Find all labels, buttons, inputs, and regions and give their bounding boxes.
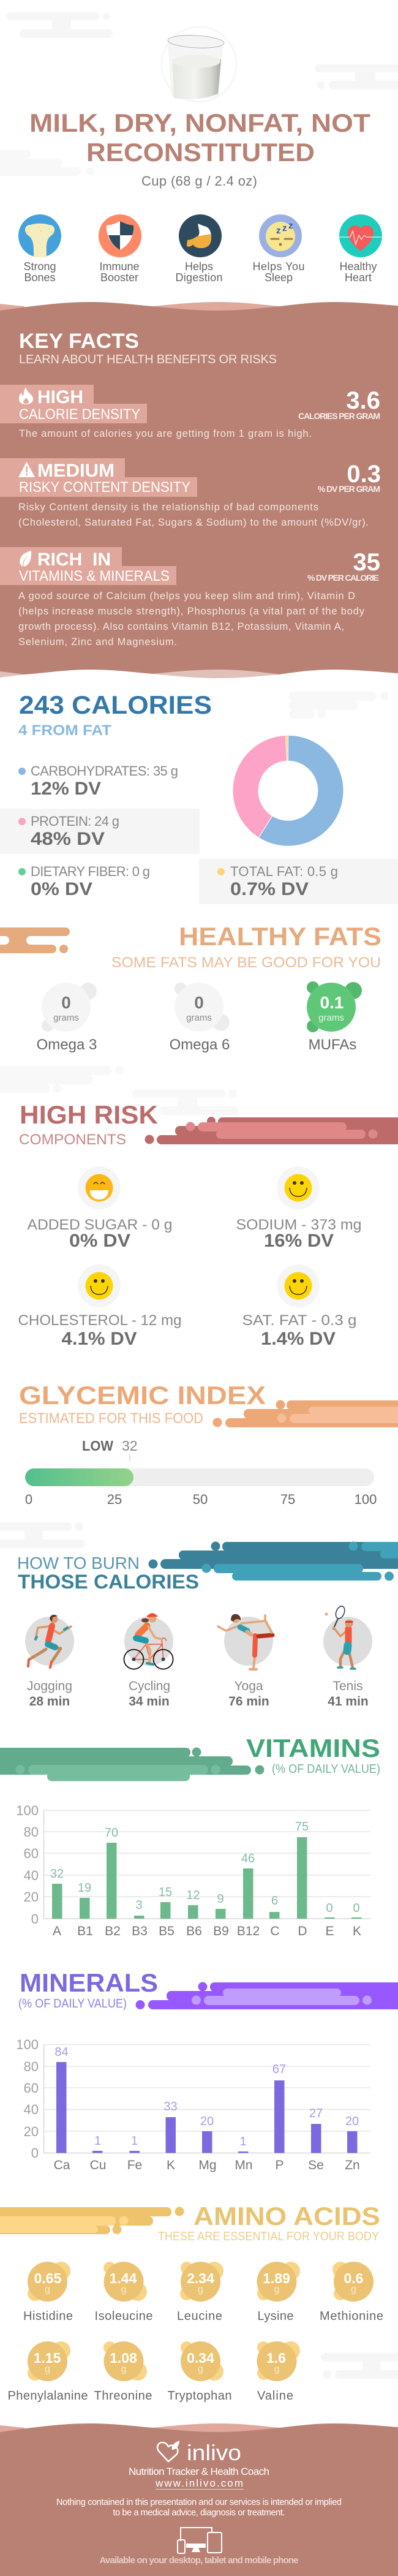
benefit labels: Strong — [23, 260, 56, 273]
legend: total fat: 0.7% DV — [230, 879, 309, 899]
amino: histidine — [23, 2262, 73, 2323]
bar chart: vitamins: 12 — [186, 1889, 200, 1902]
legend: total fat: TOTAL FAT: 0.5 g — [230, 864, 338, 879]
bar chart: minerals: Mn — [235, 2158, 253, 2172]
fat: omega 3: Omega 3 — [37, 1037, 97, 1053]
food photo: glass of milk — [162, 27, 236, 102]
bar chart: vitamins: B6 — [186, 1924, 202, 1938]
panel: key facts — [0, 302, 398, 678]
logo: inlivo: inlivo — [187, 2440, 241, 2465]
subheading: SOME FATS MAY BE GOOD FOR YOU — [111, 954, 381, 971]
icon: helps you sleep: z — [288, 221, 293, 231]
legend: carbohydrates: CARBOHYDRATES: 35 g — [31, 763, 178, 779]
fat: omega 6: Omega 6 — [170, 1037, 230, 1053]
bar chart: vitamins: E — [325, 1924, 334, 1938]
amino: threonine: g — [121, 2364, 126, 2374]
panel background — [0, 302, 398, 674]
amino: lysine: 1.89 — [263, 2270, 290, 2286]
fact: medium risky content density: Risky Content density is the relationship of bad components — [18, 502, 318, 513]
fact: rich in vitamins and minerals: % DV PER CALORIE — [307, 573, 379, 583]
benefit labels: Immune — [99, 260, 140, 273]
decoration: red bars — [145, 1117, 398, 1144]
fact: rich in vitamins and minerals: growth process). Also contains Vitamin B12, Potassium, Vitamin A, — [18, 621, 344, 632]
bar chart: vitamins: A — [53, 1924, 61, 1938]
legend: protein: PROTEIN: 24 g — [31, 814, 119, 829]
gauge value label: LOW — [82, 1438, 113, 1454]
logo: inlivo — [157, 2440, 241, 2465]
fat: MUFAs: MUFAs — [309, 1037, 356, 1053]
legend: total fat — [199, 859, 398, 904]
bar chart: vitamins: 75 — [295, 1820, 309, 1834]
donut chart — [233, 736, 344, 846]
heading: HEALTHY FATS — [179, 922, 381, 951]
gauge axis: 0 — [25, 1492, 32, 1507]
gauge axis: 100 — [355, 1492, 377, 1507]
title — [29, 108, 370, 167]
bar chart: minerals: Cu — [90, 2158, 106, 2172]
item: sodium — [236, 1166, 361, 1251]
bar chart: vitamins: 0 — [353, 1902, 360, 1915]
amino: histidine: 0.65 — [34, 2270, 62, 2286]
item: sodium: SODIUM - 373 mg — [236, 1217, 361, 1233]
bar chart: vitamins: 100 — [16, 1803, 39, 1818]
bar chart: vitamins: C — [270, 1924, 280, 1938]
item: cholesterol: CHOLESTEROL - 12 mg — [18, 1312, 181, 1329]
bar chart: vitamins: 15 — [159, 1886, 172, 1899]
background cloud: top left — [6, 12, 113, 38]
amino: histidine: Histidine — [23, 2310, 73, 2323]
subheading: THESE ARE ESSENTIAL FOR YOUR BODY — [158, 2230, 379, 2243]
background cloud: calories — [289, 692, 389, 719]
bar chart: minerals: Fe — [127, 2158, 142, 2172]
bar chart: vitamins: 80 — [24, 1824, 39, 1840]
bar chart: vitamins: B9 — [213, 1924, 229, 1938]
panel: healthy fats — [0, 922, 381, 1053]
legend: protein: 48% DV — [31, 829, 105, 849]
fact: rich in vitamins and minerals: 35 — [353, 549, 380, 576]
amino: methionine: 0.6 — [344, 2270, 363, 2286]
fact: high calorie density: HIGH — [37, 387, 83, 407]
wave accent — [0, 2423, 279, 2435]
bar chart: minerals: Zn — [345, 2158, 360, 2172]
background cloud: top right — [315, 64, 398, 89]
panel: vitamins — [0, 1734, 380, 1938]
bar chart: minerals: 67 — [272, 2063, 286, 2076]
bar chart: vitamins: B2 — [105, 1924, 121, 1938]
background cloud: burn calories — [0, 1522, 85, 1548]
activity: jogging: 28 min — [29, 1694, 70, 1709]
heading: VITAMINS — [246, 1734, 380, 1762]
fact: high calorie density: 3.6 — [346, 387, 380, 414]
panel: footer — [0, 2423, 398, 2576]
item: added sugar: ADDED SUGAR - 0 g — [27, 1217, 173, 1233]
activity: tennis: 41 min — [328, 1694, 369, 1709]
subheading: (% OF DAILY VALUE) — [272, 1762, 380, 1776]
gauge axis: 75 — [280, 1492, 295, 1507]
icon: healthy heart — [339, 214, 382, 257]
bar chart: vitamins: 70 — [105, 1826, 118, 1840]
bar chart: vitamins: 6 — [271, 1894, 278, 1908]
subheading: (% OF DAILY VALUE) — [18, 1997, 127, 2011]
gauge value label — [82, 1438, 138, 1461]
panel: glycemic index — [19, 1381, 398, 1507]
amino: isoleucine: g — [121, 2284, 126, 2295]
fat: omega 6: 0 — [194, 993, 204, 1012]
benefit labels: Bones — [24, 271, 56, 284]
bar chart: vitamins: B5 — [159, 1924, 175, 1938]
benefit labels: Helps — [185, 260, 213, 273]
background cloud: left of title — [0, 150, 94, 176]
amino: threonine — [94, 2341, 152, 2403]
bar chart: vitamins: 32 — [50, 1867, 64, 1881]
subheading: 4 FROM FAT — [18, 722, 111, 739]
icon: flame — [19, 387, 33, 404]
fact: high calorie density: CALORIE DENSITY — [19, 406, 140, 423]
amino: isoleucine — [94, 2262, 153, 2323]
heading: THOSE CALORIES — [18, 1571, 199, 1593]
fat: omega 6 — [170, 983, 230, 1053]
amino: valine: 1.6 — [266, 2350, 286, 2366]
background cloud: above high risk — [0, 1066, 124, 1093]
icon: devices — [178, 2528, 222, 2553]
item: cholesterol: 4.1% DV — [61, 1329, 137, 1349]
benefit labels: Sleep — [265, 271, 293, 284]
fat: MUFAs — [307, 981, 362, 1053]
icon: helps you sleep — [259, 214, 302, 257]
bar chart: minerals: 27 — [309, 2107, 323, 2120]
bar chart: vitamins: 9 — [217, 1892, 224, 1906]
amino: leucine: 2.34 — [187, 2270, 214, 2286]
bar chart: vitamins: 0 — [326, 1902, 333, 1915]
amino: methionine: g — [351, 2284, 356, 2295]
activity: cycling — [124, 1613, 173, 1709]
amino: leucine: g — [198, 2284, 203, 2295]
fact: rich in vitamins and minerals: RICH IN — [37, 550, 111, 570]
icon: helps digestion — [179, 214, 222, 257]
activity: yoga: Yoga — [234, 1679, 263, 1693]
benefit labels: Helps You — [252, 260, 305, 273]
fact: medium risky content density: 0.3 — [347, 461, 381, 488]
bar chart: minerals: 0 — [31, 2145, 39, 2161]
item: added sugar — [27, 1166, 173, 1251]
bar chart: vitamins: K — [353, 1924, 361, 1938]
amino: lysine — [257, 2262, 300, 2323]
website link: www.inlivo.com — [155, 2477, 243, 2489]
background cloud: bottom right — [321, 2353, 398, 2379]
icon: warning triangle — [18, 462, 35, 477]
bar chart: minerals — [16, 2037, 370, 2172]
amino: phenylalanine: Phenylalanine — [7, 2389, 88, 2403]
bar chart: minerals: 1 — [131, 2134, 138, 2148]
bar chart: minerals: Ca — [54, 2158, 70, 2172]
panel: amino acids — [0, 2202, 383, 2403]
fact: rich in vitamins and minerals: A good source of Calcium (helps you keep slim and trim), Vitamin D — [18, 591, 355, 602]
bar chart: vitamins: 20 — [24, 1889, 39, 1905]
benefit icons row — [18, 214, 382, 257]
amino: leucine — [177, 2262, 223, 2323]
gauge axis: 25 — [107, 1492, 122, 1507]
background cloud: centre — [132, 1089, 239, 1115]
item: added sugar: 0% DV — [69, 1231, 130, 1251]
amino: leucine: Leucine — [177, 2310, 222, 2323]
title: MILK, DRY, NONFAT, NOT — [29, 108, 370, 137]
bar chart: minerals: 80 — [24, 2059, 39, 2074]
bar chart: vitamins: 46 — [241, 1852, 255, 1865]
decoration: teal bars — [148, 1541, 398, 1581]
activity: cycling: Cycling — [129, 1679, 170, 1693]
amino: tryptophan — [168, 2341, 231, 2403]
icon: helps you sleep: z — [276, 225, 280, 236]
activity: tennis — [323, 1605, 372, 1709]
activity: cycling: 34 min — [129, 1694, 170, 1709]
fact: high calorie density — [0, 385, 380, 439]
disclaimer: Nothing contained in this presentation and our services is intended or implied — [56, 2498, 342, 2507]
legend: dietary fiber: DIETARY FIBER: 0 g — [31, 864, 150, 879]
benefit labels — [23, 260, 377, 284]
bar chart: minerals: 33 — [163, 2100, 178, 2113]
amino: valine: Valine — [257, 2389, 293, 2403]
heading — [17, 1554, 199, 1593]
panel: high risk components — [18, 1100, 398, 1349]
fact: medium risky content density: RISKY CONTENT DENSITY — [19, 479, 190, 496]
amino: valine: g — [274, 2364, 279, 2374]
gauge axis — [25, 1492, 377, 1507]
amino: lysine: g — [274, 2284, 279, 2295]
legend: dietary fiber — [18, 864, 150, 899]
activity: yoga — [218, 1614, 273, 1709]
fact: medium risky content density: MEDIUM — [37, 461, 115, 481]
legend: dietary fiber: 0% DV — [31, 879, 92, 899]
bar chart: minerals: P — [275, 2158, 284, 2172]
bar chart: minerals: 84 — [54, 2045, 69, 2059]
fat: MUFAs: 0.1 — [320, 993, 344, 1012]
fact: medium risky content density: (Cholesterol, Saturated Fat, Sugars & Sodium) to the amount (%DV/gr). — [18, 517, 369, 528]
wave top — [0, 302, 279, 314]
amino: phenylalanine — [7, 2341, 88, 2403]
bar chart: vitamins: B12 — [237, 1924, 260, 1938]
fat: MUFAs: grams — [318, 1013, 344, 1023]
icon: leaf — [20, 551, 31, 567]
legend: protein — [0, 809, 200, 854]
bar chart: vitamins: 19 — [78, 1881, 91, 1895]
bar chart: minerals: 60 — [24, 2080, 39, 2096]
bar chart: vitamins: B1 — [77, 1924, 93, 1938]
amino: methionine — [320, 2262, 383, 2323]
amino: isoleucine: Isoleucine — [94, 2310, 153, 2323]
bar chart: minerals: 40 — [24, 2102, 39, 2117]
fact: medium risky content density: % DV PER GRAM — [318, 484, 380, 494]
item: saturated fat: 1.4% DV — [261, 1329, 336, 1349]
bar chart: vitamins: 0 — [31, 1911, 39, 1927]
bar chart: vitamins — [16, 1803, 370, 1938]
amino: isoleucine: 1.44 — [110, 2270, 137, 2286]
icon: helps you sleep: z — [282, 223, 287, 233]
item: saturated fat: SAT. FAT - 0.3 g — [242, 1312, 356, 1329]
decoration: green bars — [0, 1747, 265, 1781]
tagline: Nutrition Tracker & Health Coach — [129, 2466, 269, 2477]
panel: calories — [0, 690, 398, 904]
activity: tennis: Tenis — [332, 1679, 363, 1693]
activity: jogging — [25, 1615, 74, 1709]
bar chart: minerals: 100 — [16, 2037, 39, 2052]
heading: 243 CALORIES — [19, 690, 212, 719]
amino: tryptophan: Tryptophan — [168, 2389, 231, 2403]
fat: omega 3: grams — [53, 1013, 79, 1023]
availability note: Available on your desktop, tablet and mobile phone — [99, 2555, 299, 2566]
benefit labels: Heart — [345, 271, 372, 284]
icon: immune booster — [99, 214, 141, 257]
heading: HOW TO BURN — [17, 1554, 140, 1573]
legend: carbohydrates: 12% DV — [31, 779, 101, 799]
panel: minerals — [16, 1968, 398, 2172]
fact: medium risky content density — [0, 458, 381, 528]
fact: high calorie density: The amount of calories you are getting from 1 gram is high. — [19, 428, 312, 439]
bar chart: vitamins: 60 — [24, 1846, 39, 1861]
fat: omega 3 — [37, 983, 97, 1053]
amino: valine — [257, 2341, 300, 2403]
benefit labels: Booster — [100, 271, 138, 284]
heading: HIGH RISK — [20, 1100, 158, 1129]
bar chart: minerals: 20 — [345, 2115, 359, 2128]
subheading: ESTIMATED FOR THIS FOOD — [19, 1410, 203, 1427]
activity: yoga: 76 min — [228, 1694, 269, 1709]
disclaimer: to be a medical advice, diagnosis or treatment. — [113, 2508, 285, 2518]
heading: KEY FACTS — [19, 330, 139, 353]
icon: strong bones — [18, 214, 61, 257]
amino: methionine: Methionine — [320, 2310, 383, 2323]
benefit labels: Digestion — [175, 271, 223, 284]
amino: histidine: g — [45, 2284, 50, 2295]
subheading: COMPONENTS — [19, 1131, 126, 1148]
gauge bar — [25, 1468, 374, 1486]
gauge axis: 50 — [193, 1492, 208, 1507]
bar chart: minerals: K — [167, 2158, 175, 2172]
item: sodium: 16% DV — [264, 1231, 334, 1251]
subheading: LEARN ABOUT HEALTH BENEFITS OR RISKS — [19, 353, 277, 366]
bar chart: vitamins: 3 — [135, 1898, 143, 1912]
bar chart: minerals: 1 — [239, 2135, 247, 2148]
amino: phenylalanine: 1.15 — [34, 2350, 61, 2366]
fact: high calorie density: CALORIES PER GRAM — [298, 411, 380, 421]
bar chart: vitamins: B3 — [132, 1924, 148, 1938]
amino: lysine: Lysine — [257, 2310, 294, 2323]
amino: threonine: 1.08 — [110, 2350, 137, 2366]
decoration: yellow bars — [0, 2207, 184, 2234]
bar chart: minerals: 20 — [24, 2124, 39, 2139]
item: saturated fat — [242, 1264, 356, 1349]
decoration: orange bars — [213, 1400, 398, 1427]
bar chart: minerals: 1 — [94, 2134, 101, 2148]
fat: omega 3: 0 — [61, 993, 71, 1012]
gauge value label: 32 — [122, 1438, 138, 1454]
bar chart: minerals: Mg — [198, 2158, 217, 2172]
bar chart: minerals: 20 — [200, 2115, 214, 2128]
serving size: Cup (68 g / 2.4 oz) — [141, 173, 257, 189]
heading: GLYCEMIC INDEX — [19, 1381, 266, 1410]
fact: rich in vitamins and minerals — [0, 547, 380, 648]
footer background — [0, 2423, 398, 2576]
amino: tryptophan: g — [198, 2364, 203, 2374]
panel: how to burn those calories — [17, 1541, 398, 1709]
heading: AMINO ACIDS — [193, 2202, 380, 2230]
disclaimer — [56, 2498, 342, 2518]
amino: phenylalanine: g — [45, 2364, 50, 2374]
benefit labels: Healthy — [339, 260, 377, 273]
item: cholesterol — [18, 1264, 181, 1349]
wave bottom accent — [0, 668, 279, 678]
amino: tryptophan: 0.34 — [187, 2350, 214, 2366]
bar chart: vitamins: D — [298, 1924, 307, 1938]
activity: jogging: Jogging — [27, 1679, 72, 1693]
legend: carbohydrates — [18, 763, 178, 799]
decoration: orange bars — [0, 927, 70, 953]
amino: threonine: Threonine — [94, 2389, 152, 2403]
bar chart: minerals: Se — [308, 2158, 324, 2172]
fat: omega 6: grams — [186, 1013, 212, 1023]
bar chart: vitamins: 40 — [24, 1868, 39, 1883]
heading: MINERALS — [20, 1968, 158, 1997]
fact: rich in vitamins and minerals: Selenium, Zinc and Magnesium. — [18, 636, 177, 648]
title: RECONSTITUTED — [86, 138, 315, 167]
fact: rich in vitamins and minerals: (helps increase muscle strength), Phosphorus (a vital part of the body — [18, 606, 365, 617]
decoration: purple bars — [136, 1982, 398, 2009]
fact: rich in vitamins and minerals: VITAMINS & MINERALS — [19, 568, 170, 584]
